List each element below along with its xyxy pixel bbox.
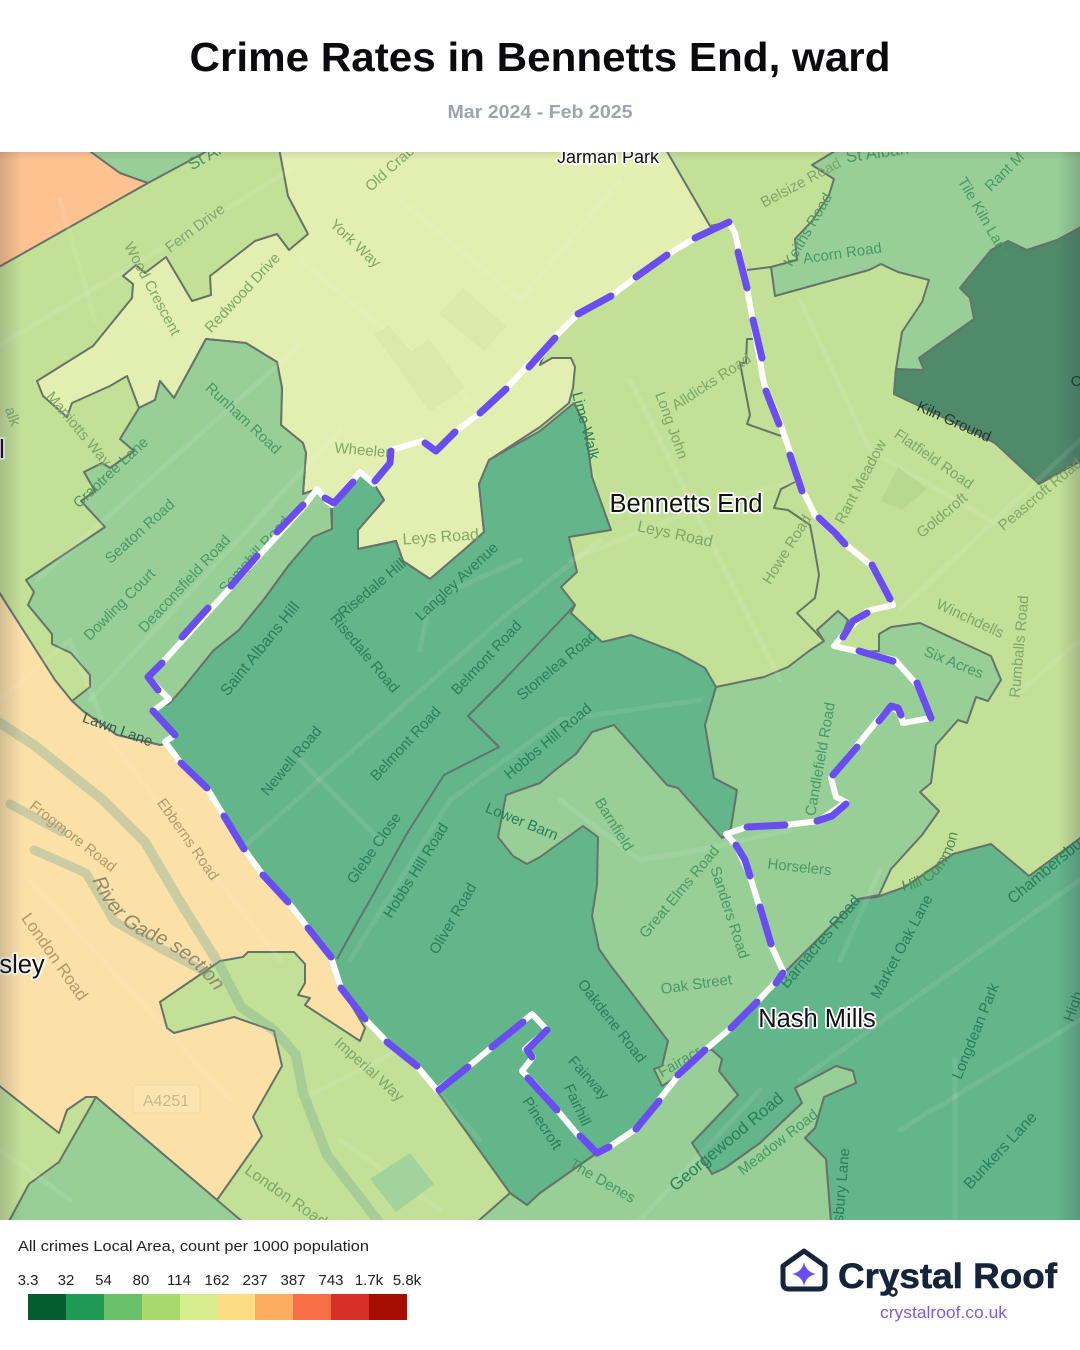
street labels: on dark green areas: Saint Albans Hill xyxy=(218,599,303,699)
ward boundary: white line xyxy=(148,222,931,1153)
logo y-dot xyxy=(890,1288,896,1296)
legend scale values: 114 xyxy=(167,1272,191,1289)
ward boundary: purple dashes xyxy=(148,222,931,1153)
street labels: on light areas: Rumballs Road xyxy=(1007,595,1032,698)
street labels: on medium green areas: Deaconsfield Road xyxy=(135,532,234,636)
street labels: on medium green areas: Tile Kiln Lane xyxy=(954,174,1014,261)
street labels: on medium green areas: Hill Common xyxy=(902,832,958,891)
logo: Crystal Roof xyxy=(783,1251,1057,1322)
area: medium green south-west xyxy=(8,1097,244,1223)
ward-internal boundary lines xyxy=(337,267,824,959)
road shield A4251 xyxy=(133,1085,200,1113)
street labels: on dark green areas: rsbury Lane xyxy=(830,1147,853,1228)
street labels: on dark green areas: Lower Barn xyxy=(483,800,560,844)
legend scale values xyxy=(18,1272,422,1289)
street labels: on dark green areas: Georgewood Road xyxy=(666,1089,787,1195)
street labels: on dark green areas: Langley Avenue xyxy=(412,539,502,624)
area: medium green Georgewood and The Denes xyxy=(476,1050,856,1223)
icon: house with star xyxy=(783,1251,825,1289)
street labels: on light areas: London Road xyxy=(241,1162,330,1231)
place labels xyxy=(0,147,876,1033)
legend title: All crimes Local Area, count per 1000 population xyxy=(18,1239,369,1255)
street labels: on dark green areas: Oakdene Road xyxy=(574,976,649,1066)
street labels: on medium green areas: Candlefield Road xyxy=(802,701,839,817)
street labels: on medium green areas xyxy=(74,152,1024,1202)
subtitle: date range: Mar 2024 - Feb 2025 xyxy=(448,102,632,122)
legend scale values: 387 xyxy=(280,1272,306,1289)
faint street network xyxy=(0,170,1080,1220)
map base area xyxy=(0,152,1080,1220)
street labels: on dark green areas: Longdean Park xyxy=(949,980,1003,1082)
street labels: on light areas: Redwood Drive xyxy=(202,250,284,336)
street labels: on medium green areas: Acorn Road xyxy=(802,240,883,267)
street labels: on medium green areas: Oak Street xyxy=(660,971,734,998)
area: dark green Nash Mills xyxy=(692,836,1080,1223)
street labels: on peach area: River Gade section xyxy=(92,877,222,990)
street labels: on dark green areas: Stonelea Road xyxy=(514,627,601,704)
street labels: on dark green areas xyxy=(80,373,1080,1228)
street labels: on dark green areas: Kiln Ground xyxy=(914,398,993,446)
street labels: on light areas: Rant Meadow xyxy=(832,437,890,527)
street labels: on dark green areas: Hobbs Hill Road xyxy=(380,820,452,921)
area: medium green top-right xyxy=(771,148,1080,484)
place labels: sley xyxy=(0,951,45,979)
legend scale values: 80 xyxy=(133,1272,149,1289)
street labels: on peach area xyxy=(22,798,222,1001)
area: darkest green Kiln Ground xyxy=(894,226,1080,484)
street labels: on medium green areas: Dowling Court xyxy=(80,565,160,644)
road shield A4251: A4251 xyxy=(143,1093,189,1110)
area: dark green Belmont and Hobbs Hill xyxy=(151,403,784,1205)
street labels: on medium green areas: Crabtree Lane xyxy=(70,434,152,512)
legend scale values: 237 xyxy=(242,1272,268,1289)
street labels: on medium green areas: Fairacr xyxy=(655,1043,704,1081)
street labels: on dark green areas: Newell Road xyxy=(258,723,325,799)
street labels: on medium green areas: Meadow Road xyxy=(735,1106,822,1179)
street labels: on light areas: Old Crab xyxy=(362,142,418,195)
street labels: on medium green areas: Great Elms Road xyxy=(636,843,723,942)
river Gade xyxy=(0,723,379,1222)
place labels: Jarman Park xyxy=(557,147,660,167)
place labels: Nash Mills xyxy=(758,1005,876,1033)
street labels: on light areas: Winchdells xyxy=(933,596,1006,642)
street labels: on dark green areas: Hobbs Hill Road xyxy=(501,700,595,783)
street labels: on medium green areas: Barnfield xyxy=(591,795,637,854)
legend scale values: 54 xyxy=(95,1272,112,1289)
street labels: on dark green areas: Belmont Road xyxy=(448,617,525,698)
street labels: on light areas: Leys Road xyxy=(636,518,714,551)
street labels: on light areas: Long John xyxy=(651,390,691,461)
street labels: on dark green areas: Lawn Lane xyxy=(80,709,155,750)
website url: crystalroof.co.uk xyxy=(880,1304,1008,1322)
street labels: on medium green areas: The Denes xyxy=(566,1155,638,1207)
buildings and parks xyxy=(370,288,927,1212)
street labels: on medium green areas: Semphill Road xyxy=(216,513,294,597)
map edge shading xyxy=(0,152,1080,1220)
street labels: on medium green areas: St Al xyxy=(184,140,224,174)
street labels: on dark green areas: Bunkers Lane xyxy=(961,1109,1041,1193)
street labels: on dark green areas: Market Oak Lane xyxy=(868,892,937,1002)
legend scale values: 5.8k xyxy=(393,1272,422,1289)
street labels: on light areas: Goldcroft xyxy=(913,489,972,542)
street labels: on medium green areas: Seaton Road xyxy=(102,496,178,567)
area: medium green Runham Road xyxy=(26,339,332,745)
legend scale values: 1.7k xyxy=(355,1272,384,1289)
area: medium green Horselers xyxy=(705,611,1001,973)
legend scale values: 32 xyxy=(58,1272,74,1289)
street labels: on dark green areas: Fairhill xyxy=(560,1081,594,1129)
street labels: on light areas: Marriotts Way xyxy=(42,388,115,470)
street labels: on dark green areas: Pinecroft xyxy=(519,1094,565,1154)
street labels: on peach area: London Road xyxy=(17,910,92,1004)
street labels: on medium green areas: Six Acres xyxy=(922,643,986,682)
street labels: on medium green areas: St Alban xyxy=(845,139,910,166)
street labels: on light areas: Fern Drive xyxy=(162,201,228,256)
area: medium green Barnfield xyxy=(498,725,784,1086)
street labels: on dark green areas: Risedale Road xyxy=(326,610,403,696)
street labels: on light areas: Wood Crescent xyxy=(120,239,184,339)
street labels: on light areas: Alldicks Road xyxy=(669,350,754,414)
logo wordmark: Crystal Roof xyxy=(838,1257,1057,1296)
street labels: on medium green areas: Runham Road xyxy=(202,380,284,458)
street labels: on light areas: Howe Road xyxy=(759,512,815,587)
street labels: on light areas: Wheeler xyxy=(334,440,391,461)
legend xyxy=(18,1239,422,1320)
legend colour scale xyxy=(28,1294,407,1320)
legend scale values: 743 xyxy=(318,1272,344,1289)
street labels: on peach area: Frogmore Road xyxy=(26,797,119,875)
area: orange top-left xyxy=(0,148,148,268)
area: peach Apsley xyxy=(0,589,365,1200)
street labels: on medium green areas: Keiths Road xyxy=(780,190,836,269)
street labels: on dark green areas: Fairway xyxy=(564,1053,613,1104)
street labels: on light areas: Belsize Road xyxy=(758,155,844,211)
street labels: on medium green areas: Sanders Road xyxy=(706,864,752,961)
legend scale values: 162 xyxy=(204,1272,230,1289)
street labels: on medium green areas: Rant M xyxy=(982,149,1028,195)
street labels: on dark green areas: Barnacres Road xyxy=(777,892,864,992)
street labels: on light areas: York Way xyxy=(326,216,384,272)
street labels: on light areas: Flatfield Road xyxy=(891,426,976,493)
street labels: on dark green areas: Lime Walk xyxy=(568,390,603,462)
legend scale values: 3.3 xyxy=(18,1272,38,1289)
street labels: on medium green areas: Horselers xyxy=(767,856,832,879)
street labels: on light areas: Imperial Way xyxy=(331,1034,407,1105)
street labels: on dark green areas: Belmont Road xyxy=(367,703,444,784)
street labels: on dark green areas: Glebe Close xyxy=(344,810,405,887)
street labels: on dark green areas: Risedale Hill xyxy=(335,555,410,622)
place labels: Bennetts End xyxy=(609,490,763,518)
street labels: on light areas: Leys Road xyxy=(402,526,479,549)
street labels: on light areas: alk xyxy=(1,405,24,429)
title: Crime Rates in Bennetts End, ward xyxy=(190,34,890,80)
area: yellow-green Jarman Park xyxy=(37,148,729,579)
street labels: on peach area: Ebberns Road xyxy=(153,795,222,884)
street labels: on dark green areas: Oliver Road xyxy=(426,880,480,957)
area: medium green top-left wedge xyxy=(90,152,207,184)
